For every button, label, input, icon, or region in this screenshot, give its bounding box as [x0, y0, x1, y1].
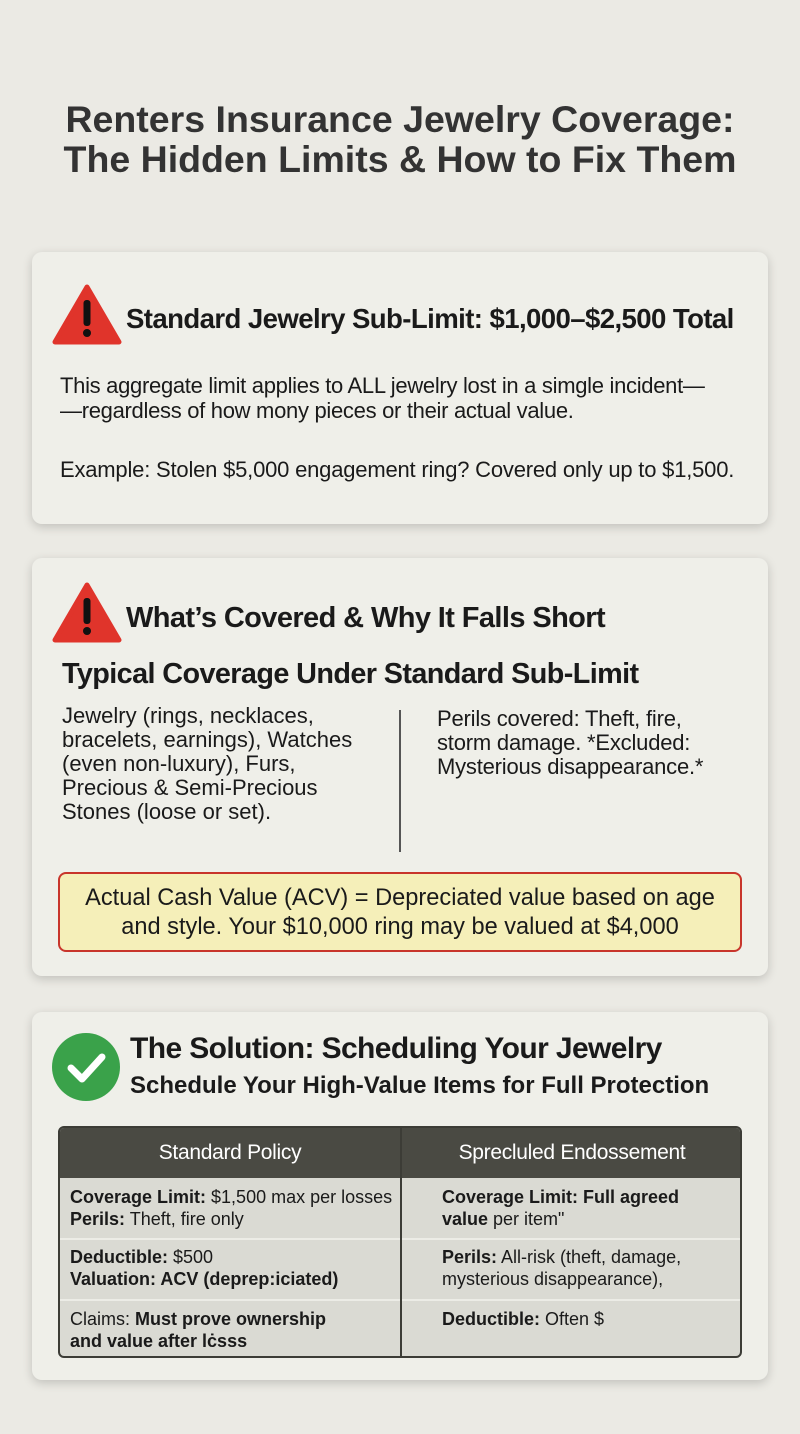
- heading: The Solution: Scheduling Your Jewelry: [130, 1032, 662, 1065]
- left column text: Precious & Semi-Precious: [62, 775, 318, 800]
- callout: ACV: and style. Your $10,000 ring may be valued at $4,000: [121, 914, 679, 940]
- body text: —regardless of how mony pieces or their actual value.: [60, 398, 574, 423]
- left column text: [62, 703, 352, 824]
- endorsement column cells: value per item": [442, 1209, 564, 1229]
- table header: [60, 1128, 744, 1178]
- body text: This aggregate limit applies to ALL jewelry lost in a simgle incident—: [60, 373, 705, 398]
- title: The Hidden Limits & How to Fix Them: [64, 138, 736, 180]
- left column text: bracelets, earnings), Watches: [62, 727, 352, 752]
- left column text: Stones (loose or set).: [62, 799, 271, 824]
- comparison table: mysterious disappearance),: [442, 1269, 663, 1289]
- left column text: (even non-luxury), Furs,: [62, 751, 296, 776]
- panel: standard sub-limit: [32, 252, 768, 524]
- icon: warning triangle: [52, 582, 122, 642]
- endorsement column cells: Coverage Limit: Full agreed: [442, 1187, 679, 1207]
- example text: Example: Stolen $5,000 engagement ring? Covered only up to $1,500.: [60, 457, 734, 482]
- heading: Standard Jewelry Sub-Limit: $1,000–$2,500 Total: [126, 303, 734, 334]
- callout: ACV: Actual Cash Value (ACV) = Depreciated value based on age: [85, 885, 715, 911]
- comparison table: Perils: All-risk (theft, damage,: [442, 1247, 681, 1267]
- comparison table: Claims: Must prove ownership: [70, 1309, 326, 1329]
- table header: Standard Policy: [159, 1141, 301, 1164]
- table header: Sprecluled Endossement: [459, 1141, 685, 1164]
- comparison table: Valuation: ACV (deprep:iciated): [70, 1269, 338, 1289]
- comparison table: Deductible: $500: [70, 1247, 213, 1267]
- comparison table: and value after lċsss: [70, 1331, 247, 1351]
- title: [64, 98, 736, 180]
- standard column cells: Coverage Limit: $1,500 max per losses: [70, 1187, 392, 1207]
- panel: solution: [32, 1012, 768, 1380]
- right column text: Perils covered: Theft, fire,: [437, 706, 682, 731]
- subheading: Typical Coverage Under Standard Sub-Limit: [62, 658, 639, 690]
- right column text: storm damage. *Excluded:: [437, 730, 690, 755]
- comparison table: [58, 1126, 742, 1358]
- title: Renters Insurance Jewelry Coverage:: [65, 98, 735, 140]
- comparison table: Deductible: Often $: [442, 1309, 604, 1329]
- icon: green check: [52, 1033, 120, 1101]
- icon: warning triangle: [52, 284, 122, 344]
- panel: what's covered: [32, 558, 768, 976]
- right column text: [437, 706, 704, 779]
- subheading: Schedule Your High-Value Items for Full Protection: [130, 1072, 709, 1099]
- standard column cells: [70, 1187, 392, 1229]
- endorsement column cells: [442, 1187, 679, 1229]
- heading: What’s Covered & Why It Falls Short: [126, 602, 605, 634]
- left column text: Jewelry (rings, necklaces,: [62, 703, 314, 728]
- right column text: Mysterious disappearance.*: [437, 754, 703, 779]
- callout: ACV: [58, 872, 742, 952]
- body text: [60, 373, 705, 423]
- standard column cells: Perils: Theft, fire only: [70, 1209, 244, 1229]
